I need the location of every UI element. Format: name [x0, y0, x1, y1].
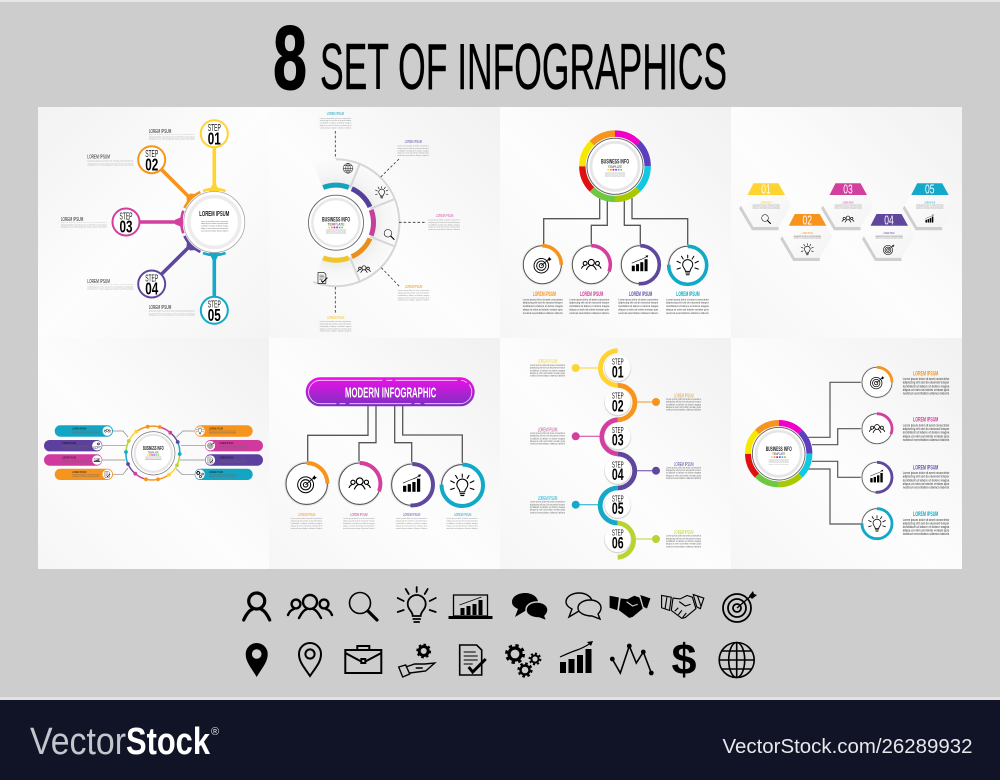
footer light strip: [0, 697, 1000, 700]
title: 8: [273, 8, 307, 109]
footer image id: VectorStock.com/26289932: [722, 736, 972, 758]
progress circles: [522, 244, 708, 286]
left bars: [44, 425, 113, 480]
step 05: STEP: [208, 299, 221, 311]
step 04: 04: [145, 279, 158, 299]
step 02 disc: 02: [612, 397, 624, 415]
panel: pill timeline: [44, 425, 263, 481]
step 01 disc: [604, 355, 631, 382]
fan body: [313, 159, 399, 286]
step 01: STEP: [208, 122, 221, 134]
icon: globe: [719, 642, 754, 678]
wave captions: LOREM IPSUM: [674, 393, 694, 399]
modern captions: LOREM IPSUM: [454, 512, 471, 517]
step 03: STEP: [120, 210, 132, 222]
progress circles: [861, 366, 893, 540]
hexagon 05: LOREM IPSUM: [924, 200, 936, 204]
step captions: LOREM IPSUM: [149, 129, 172, 135]
step 02 disc: STEP: [612, 391, 624, 401]
step 06 disc: 06: [612, 534, 624, 552]
hexagon 01: 01: [761, 182, 771, 197]
centre circle: TEMPLATE: [148, 450, 159, 454]
step 04: [138, 270, 165, 299]
step 05 disc: 05: [612, 500, 624, 518]
step 03: [112, 208, 140, 237]
top light strip: [0, 0, 1000, 2]
step 02 disc: [604, 389, 631, 416]
centre circle: [308, 195, 364, 250]
tree captions: LOREM IPSUM: [580, 292, 603, 298]
centre circle: TEMPLATE: [328, 222, 345, 227]
icon: briefcase: [345, 646, 381, 673]
step 03 disc: [604, 423, 631, 451]
icon: bar chart: [560, 641, 593, 673]
hub circle: [184, 192, 245, 252]
step 06 disc: [604, 526, 631, 553]
right bars: LOREM IPSUM: [219, 456, 234, 460]
panel: six step wave: [530, 351, 702, 557]
step 02: 02: [145, 154, 158, 174]
hexagon 05: [903, 182, 955, 230]
panel: five step hub: [61, 120, 245, 325]
horizontal connectors: [808, 382, 862, 524]
modern captions: LOREM IPSUM: [298, 512, 315, 517]
modern captions: [291, 512, 479, 530]
hexagon 02: LOREM IPSUM: [802, 231, 813, 235]
hexagon 03: 03: [843, 182, 853, 197]
step 05 disc: [604, 492, 631, 519]
step captions: LOREM IPSUM: [149, 305, 172, 311]
ring hub: [748, 423, 809, 484]
horizontal captions: LOREM IPSUM: [913, 372, 938, 378]
step 04 disc: 04: [612, 466, 624, 484]
coloured arcs: [323, 185, 373, 260]
icon: outline pin: [299, 643, 321, 676]
header pill: MODERN INFOGRAPHIC: [345, 385, 437, 401]
icon: handshake filled: [610, 595, 650, 618]
hexagon 01: [739, 182, 791, 230]
modern captions: LOREM IPSUM: [350, 512, 368, 517]
dashed leaders: [335, 131, 427, 314]
tree captions: LOREM IPSUM: [629, 292, 652, 298]
modern connectors: [308, 406, 462, 464]
hexagon 05: 05: [925, 182, 934, 197]
centre circle: BUSINESS INFO: [143, 446, 164, 452]
step 02: STEP: [145, 148, 158, 160]
dotted ring: [124, 425, 182, 481]
fan outline and dividers: [313, 159, 399, 286]
right bars: LOREM IPSUM: [209, 470, 223, 474]
centre circle: BUSINESS INFO: [322, 216, 350, 223]
icon: hand and gear: [399, 645, 435, 677]
panel: modern infographic: [284, 377, 485, 530]
horizontal captions: LOREM IPSUM: [913, 418, 938, 424]
icon: target: [723, 591, 757, 622]
wave stems and dots: [572, 364, 660, 543]
wave captions: LOREM IPSUM: [538, 496, 557, 502]
icon: search: [350, 592, 377, 620]
icon: chat outline: [566, 593, 601, 619]
left bars: LOREM IPSUM: [72, 470, 87, 474]
wave arcs: [600, 351, 635, 557]
wave captions: [530, 359, 702, 548]
step 03 disc: 03: [612, 432, 624, 450]
step 06 disc: STEP: [612, 528, 624, 538]
wave captions: LOREM IPSUM: [538, 428, 557, 434]
step 01 disc: 01: [612, 363, 624, 381]
hexagon 04: [862, 212, 914, 261]
fan captions: LOREM IPSUM: [405, 139, 422, 144]
header pill: [306, 377, 475, 406]
horizontal captions: [903, 372, 950, 536]
fan captions: LOREM IPSUM: [436, 213, 453, 218]
fan captions: [320, 111, 461, 333]
footer logo: [30, 721, 219, 763]
footer logo: ®: [211, 726, 219, 738]
hexagon 04: LOREM IPSUM: [884, 231, 895, 235]
pill connectors: [102, 431, 205, 474]
step captions: LOREM IPSUM: [87, 279, 110, 285]
icon set: row 2: [246, 636, 754, 684]
icon: dollar: $: [672, 636, 696, 684]
step 03: 03: [120, 217, 133, 237]
modern captions: LOREM IPSUM: [403, 512, 420, 517]
fan captions: LOREM IPSUM: [327, 111, 344, 116]
icon: chat filled: [512, 593, 548, 621]
horizontal captions: LOREM IPSUM: [913, 512, 938, 518]
panel: hexagons: [739, 182, 955, 261]
ring hub: BUSINESS INFO: [601, 159, 629, 166]
title: [273, 8, 727, 109]
step captions: LOREM IPSUM: [87, 155, 110, 161]
step 05 disc: STEP: [612, 493, 624, 503]
tree captions: LOREM IPSUM: [533, 292, 556, 298]
hexagon 02: 02: [803, 212, 812, 227]
left bars: LOREM IPSUM: [62, 441, 76, 445]
icon: document check: [460, 645, 486, 675]
panel: backgrounds grid: [38, 107, 962, 569]
left bars: LOREM IPSUM: [62, 456, 76, 460]
left bars: LOREM IPSUM: [72, 426, 87, 430]
step 04 disc: [604, 458, 631, 485]
panel: ring tree: [522, 134, 709, 315]
icon: light bulb: [398, 587, 436, 622]
icon: people: [288, 595, 332, 618]
hub connectors: [140, 147, 226, 297]
footer logo: Stock: [126, 721, 211, 763]
fan captions: LOREM IPSUM: [405, 284, 422, 289]
hexagon 04: 04: [884, 212, 894, 227]
icon: handshake outline: [662, 595, 704, 618]
step 02: [138, 146, 165, 174]
footer band: [0, 700, 1000, 780]
step 05: [201, 297, 228, 325]
horizontal captions: LOREM IPSUM: [913, 466, 938, 472]
step 01: [201, 120, 228, 148]
tree captions: [523, 292, 709, 315]
tree connectors: [544, 198, 688, 245]
footer logo: Vector: [30, 721, 126, 763]
step 01 disc: STEP: [612, 357, 624, 367]
step 05: 05: [208, 305, 221, 325]
panel: semicircle fan: [308, 111, 461, 333]
hexagon 02: [780, 212, 832, 261]
hexagon 03: [821, 182, 873, 230]
ring hub: BUSINESS INFO: [766, 447, 792, 453]
panel: horizontal ring tree: [748, 366, 950, 540]
hexagon 01: LOREM IPSUM: [760, 200, 772, 204]
icon: filled pin: [246, 643, 268, 677]
fan icons: [318, 163, 394, 283]
step captions: LOREM IPSUM: [61, 217, 84, 223]
centre circle: [132, 432, 175, 475]
icon: gears: [506, 646, 540, 676]
icon: line chart: [611, 644, 653, 675]
right bars: [195, 425, 263, 480]
ring hub: TEMPLATE: [772, 452, 786, 456]
tree captions: LOREM IPSUM: [676, 292, 700, 298]
right bars: LOREM IPSUM: [209, 426, 223, 430]
step 04 disc: STEP: [612, 459, 624, 469]
icon: laptop chart: [448, 595, 492, 619]
step 04: STEP: [145, 272, 158, 284]
ring hub: TEMPLATE: [608, 164, 622, 169]
wave captions: LOREM IPSUM: [674, 530, 694, 536]
step 01: 01: [208, 128, 221, 148]
hexagon 03: LOREM IPSUM: [842, 200, 854, 204]
fan captions: LOREM IPSUM: [327, 315, 344, 320]
progress circles: [284, 461, 485, 508]
hub circle: LOREM IPSUM: [199, 211, 229, 218]
step captions: [61, 129, 196, 316]
icon set: row 1: [244, 587, 757, 622]
right bars: LOREM IPSUM: [219, 441, 234, 445]
wave captions: LOREM IPSUM: [674, 462, 694, 468]
icon: person: [244, 593, 270, 620]
step 03 disc: STEP: [612, 425, 624, 435]
ring hub: [582, 134, 648, 199]
wave captions: LOREM IPSUM: [538, 359, 557, 365]
